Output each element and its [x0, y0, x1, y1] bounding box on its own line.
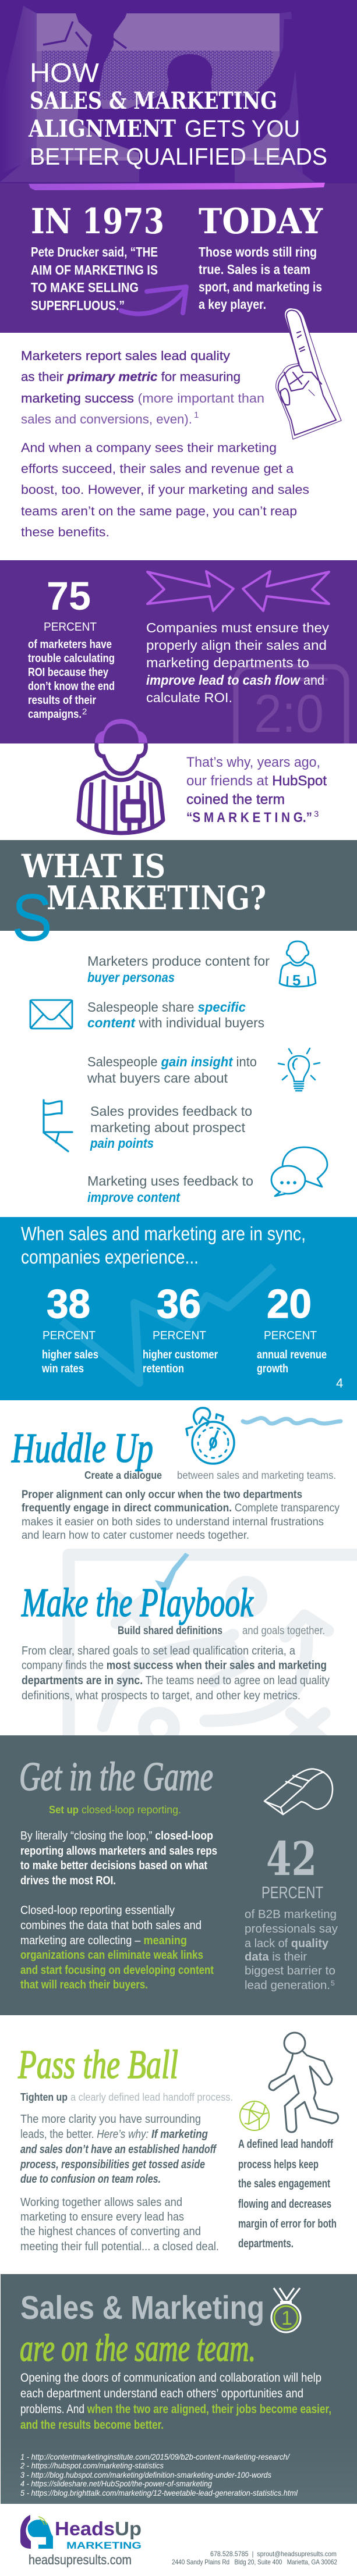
heading: marketing: MARKETING? — [47, 879, 266, 917]
text: handoff explanation: leads, the better. Here’s why: If marketing — [20, 2128, 208, 2141]
stat: 42 percent — [245, 1831, 338, 1992]
text: conclusion: each department understand each others’ opportunities and — [20, 2387, 303, 2400]
item: buyer personas: Marketers produce content for — [87, 953, 270, 969]
text: proper alignment — [22, 1489, 340, 1542]
logo: HeadsUp Marketing: HeadsUp — [55, 2518, 142, 2539]
icon: scoreboard watermark: 2:0 — [254, 684, 324, 743]
panel: 1973 vs today — [0, 183, 357, 333]
subheading: build shared definitions — [118, 1625, 325, 1637]
subheading: set up: Set up — [49, 1803, 79, 1816]
subheading: build shared definitions: Build shared definitions — [118, 1625, 222, 1637]
text: combines the data: marketing are collecting – meaning — [20, 1934, 187, 1947]
stat: 36 percent: higher customer — [143, 1349, 218, 1361]
heading: sales and marketing: Sales & Marketing — [20, 2289, 264, 2326]
text: shared goals — [22, 1645, 330, 1702]
stat: 75 percent: trouble calculating — [28, 652, 115, 665]
text: primary metric — [21, 348, 264, 426]
panel: make the playbook — [0, 1549, 357, 1743]
stat: 36 percent: retention — [143, 1362, 184, 1375]
arrow: brush check — [155, 1553, 189, 1592]
panel: footer — [0, 2504, 357, 2576]
panel: same team conclusion — [1, 2274, 357, 2504]
stat: 42 percent: 5 — [331, 1979, 335, 1987]
stat: 36 percent — [143, 1281, 218, 1375]
item: improve content — [87, 1173, 253, 1205]
arrows: converging brush arrows — [147, 571, 329, 611]
text: conclusion: and the results become better. — [20, 2418, 164, 2432]
list: source references: 4 - https://slideshare.net/HubSpot/the-power-of-smarketing — [20, 2479, 212, 2488]
text: today statement — [199, 244, 322, 312]
stat: 42 percent: professionals say — [245, 1922, 338, 1935]
panel: pass the ball — [0, 2015, 357, 2274]
heading: are on the same team: are on the same team. — [20, 2327, 256, 2369]
text: align departments: properly align their sales and — [146, 638, 327, 653]
panel: in-sync statistics — [0, 1217, 357, 1400]
text: conclusion — [20, 2371, 331, 2432]
crowd in the stands — [42, 51, 273, 100]
icon: light bulb — [278, 1048, 320, 1091]
icon: blue S letter: S — [12, 881, 52, 955]
text: defined lead handoff: departments. — [238, 2237, 294, 2250]
item: specific content: Salespeople share specific — [87, 999, 246, 1015]
text: defined lead handoff — [238, 2138, 337, 2250]
text: conclusion: Opening the doors of communication and collaboration will help — [20, 2371, 321, 2385]
subheading: set up: closed-loop reporting. — [82, 1803, 181, 1816]
stat: 36 percent: PERCENT — [153, 1329, 206, 1342]
text: HubSpot coined smarketing — [186, 755, 327, 826]
stat: 20 percent: annual revenue — [257, 1349, 327, 1361]
text: HubSpot coined smarketing: 3 — [314, 809, 319, 819]
text: combines the data: combines the data that both sales and — [20, 1919, 202, 1932]
stat: 75 percent: 75 — [47, 574, 91, 618]
panel: hero stadium tunnel — [0, 0, 357, 183]
heading: make the playbook: Make the Playbook — [21, 1581, 254, 1625]
stat: 20 percent — [257, 1281, 327, 1375]
item: specific content — [87, 999, 264, 1030]
stat: 75 percent: don’t know the end — [28, 680, 115, 693]
stat: 20 percent: 20 — [267, 1281, 312, 1326]
icon: whistle — [264, 1769, 333, 1814]
heading: when in sync — [21, 1223, 306, 1268]
item: buyer personas: buyer personas — [87, 970, 175, 985]
decorative brush checkmark — [62, 1266, 274, 1383]
website address: headsupresults.com — [29, 2552, 132, 2567]
stat: 42 percent: 42 — [266, 1831, 317, 1886]
text: Drucker quote: SUPERFLUOUS.” — [31, 298, 125, 313]
stat: 75 percent: ROI because they — [28, 666, 109, 679]
title: HOW — [30, 58, 100, 88]
icon: stopwatch — [186, 1408, 234, 1464]
text: combines the data: and start focusing on developing content — [20, 1964, 214, 1977]
text: handoff explanation: due to confusion on team roles. — [20, 2173, 161, 2186]
text: working together: Working together allows sales and — [20, 2196, 182, 2209]
subheading: tighten up: Tighten up — [20, 2091, 68, 2103]
list: source references: 3 - http://blog.hubspot.com/marketing/definition-smarketing-under-100-words — [20, 2470, 271, 2479]
stat: 75 percent: 2 — [82, 707, 87, 717]
icon: chat bubbles — [271, 1147, 327, 1196]
text: handoff explanation — [20, 2113, 217, 2186]
text: shared goals: departments are in sync. The teams need to agree on lead quality — [22, 1674, 330, 1687]
logo: HeadsUp Marketing — [20, 2515, 142, 2551]
stat: 42 percent: of B2B marketing — [245, 1908, 337, 1921]
item: gain insight — [87, 1054, 257, 1086]
subheading: create a dialogue: Create a dialogue — [84, 1469, 162, 1481]
text: HubSpot coined smarketing: That’s why, years ago, — [186, 755, 320, 770]
text: HubSpot coined smarketing: our friends at HubSpot — [186, 773, 327, 789]
text: handoff explanation: process, responsibilities get tossed aside — [20, 2158, 205, 2171]
stat: 75 percent: results of their — [28, 694, 96, 707]
list: source references — [20, 2452, 298, 2497]
referee badge — [123, 802, 143, 820]
stat: 42 percent: PERCENT — [261, 1884, 323, 1902]
text: closing the loop: reporting allows marketers and sales reps — [20, 1845, 217, 1858]
item: specific content: content with individual buyers — [87, 1015, 264, 1030]
stat: 42 percent: data is their — [245, 1950, 307, 1963]
text: primary metric: marketing success (more important than — [21, 391, 264, 405]
text: working together: the highest chances of converting and — [20, 2225, 201, 2238]
text: revenue boost: efforts succeed, their sales and revenue get a — [21, 461, 294, 476]
subheading: create a dialogue — [84, 1469, 336, 1481]
heading: Today: TODAY — [199, 201, 323, 242]
text: closing the loop: drives the most ROI. — [20, 1874, 116, 1887]
arrow: brush arrow to today — [121, 287, 186, 314]
stat: 42 percent: lead generation. — [245, 1979, 330, 1992]
subheading: tighten up: a clearly defined lead handoff process. — [70, 2091, 233, 2103]
icon: gold medal — [271, 2288, 301, 2332]
stat: 20 percent: PERCENT — [264, 1329, 317, 1342]
icon: player with jersey 5: 5 — [292, 972, 301, 989]
stat: 38 percent: win rates — [41, 1362, 84, 1375]
text: handoff explanation: and sales don’t have an established handoff — [20, 2143, 217, 2156]
icon: envelope — [30, 1000, 72, 1029]
title: SALES & MARKETING — [30, 87, 277, 115]
stat: 38 percent: 38 — [47, 1281, 90, 1326]
contact details: 678.528.5785 | sprout@headsupresults.com — [210, 2550, 337, 2558]
panel: smarketing referee — [0, 719, 357, 840]
stat: 75 percent — [28, 574, 115, 721]
icon: gold medal: 1 — [281, 2307, 292, 2329]
stat: 20 percent: growth — [257, 1362, 288, 1375]
item: improve content: improve content — [87, 1190, 181, 1205]
text: today statement: a key player. — [199, 297, 266, 312]
stat: 75 percent: of marketers have — [28, 638, 112, 651]
text: defined lead handoff: process helps keep — [238, 2158, 319, 2171]
list: smarketing items — [30, 941, 327, 1205]
heading: get in the game: Get in the Game — [19, 1755, 213, 1799]
waving scarf — [43, 22, 126, 48]
text: align departments: Companies must ensure they — [146, 620, 330, 635]
title — [28, 58, 327, 170]
silhouette of fan with raised arms — [71, 0, 306, 182]
brush stroke divider — [29, 183, 325, 190]
heading: when in sync: When sales and marketing are in sync, — [21, 1223, 306, 1244]
item: pain points: pain points — [90, 1136, 154, 1151]
icon: player with jersey 5 — [280, 941, 316, 989]
subheading: build shared definitions: and goals together. — [242, 1625, 325, 1637]
panel: what is smarketing heading — [0, 840, 357, 955]
text: align departments — [146, 620, 330, 705]
icon: referee — [79, 719, 163, 833]
text: closing the loop: to make better decisions based on what — [20, 1859, 207, 1872]
text: shared goals: definitions, what prospects to target, and other key metrics. — [22, 1689, 301, 1702]
stat: 75 percent: campaigns. — [28, 708, 82, 721]
text: shared goals: From clear, shared goals to set lead qualification criteria, a — [22, 1645, 296, 1657]
text: proper alignment: and learn how to cater customer needs together. — [22, 1529, 249, 1542]
panel: lead quality text — [0, 308, 357, 560]
stat: 38 percent: higher sales — [42, 1349, 98, 1361]
title: ALIGNMENT — [28, 115, 176, 143]
item: pain points — [90, 1104, 252, 1151]
stat: 42 percent: a lack of quality — [245, 1937, 329, 1950]
text: primary metric: sales and conversions, even). — [21, 412, 192, 426]
text: HubSpot coined smarketing: coined the term — [186, 792, 285, 807]
text: Drucker quote: AIM OF MARKETING IS — [31, 262, 158, 277]
list: source references: 1 - http://contentmarketinginstitute.com/2015/09/b2b-content-marketing-research/ — [20, 2452, 291, 2461]
item: buyer personas — [87, 953, 270, 985]
text: today statement: Those words still ring — [199, 244, 317, 259]
item: gain insight: what buyers care about — [87, 1070, 228, 1086]
panel: ROI statistics — [0, 560, 357, 766]
heading: when in sync: companies experience... — [21, 1246, 199, 1268]
text: align departments: improve lead to cash flow and — [146, 673, 324, 688]
icon: soccer player — [269, 2033, 338, 2132]
text: HubSpot coined smarketing: “S M A R K E T I N G.” — [186, 810, 312, 826]
title: GETS YOU — [185, 115, 300, 142]
stat: 36 percent: 36 — [157, 1281, 201, 1326]
text: revenue boost: these benefits. — [21, 525, 109, 539]
stat: 75 percent: PERCENT — [44, 621, 97, 634]
heading: pass the ball: Pass the Ball — [17, 2043, 178, 2087]
stat: 38 percent — [41, 1281, 98, 1375]
heading: what is: WHAT IS — [21, 847, 165, 885]
item: pain points: marketing about prospect — [90, 1120, 246, 1135]
stat: 38 percent: PERCENT — [43, 1329, 96, 1342]
text: working together: meeting their full potential... a closed deal. — [20, 2240, 219, 2253]
text: Drucker quote: Pete Drucker said, “THE — [31, 244, 158, 259]
icon: playbook diagram watermark — [69, 1554, 357, 1743]
item: gain insight: Salespeople gain insight into — [87, 1054, 257, 1069]
text: working together: marketing to ensure every lead has — [20, 2211, 184, 2223]
heading: huddle up: Huddle Up — [11, 1425, 153, 1471]
stat: 42 percent: biggest barrier to — [245, 1964, 335, 1977]
text: primary metric: Marketers report sales lead quality — [21, 348, 230, 363]
text: primary metric: 1 — [194, 410, 199, 420]
text: combines the data — [20, 1904, 214, 1991]
panel: huddle up — [0, 1400, 357, 1549]
text: handoff explanation: The more clarity you have surrounding — [20, 2113, 201, 2126]
text: combines the data: organizations can eliminate weak links — [20, 1949, 203, 1962]
text: revenue boost: teams aren’t on the same page, you can’t reap — [21, 504, 297, 518]
text: closing the loop: By literally “closing the loop,” closed-loop — [20, 1830, 213, 1842]
text: Drucker quote — [31, 244, 158, 313]
text: combines the data: that will reach their buyers. — [20, 1979, 148, 1991]
subheading: create a dialogue: between sales and marketing teams. — [177, 1469, 336, 1481]
item: improve content: Marketing uses feedback to — [87, 1173, 253, 1189]
text: align departments: calculate ROI. — [146, 690, 232, 705]
text: proper alignment: Proper alignment can only occur when the two departments — [22, 1489, 302, 1501]
subheading: tighten up — [20, 2091, 233, 2103]
text: primary metric: as their primary metric for measuring — [21, 369, 241, 384]
title: BETTER QUALIFIED LEADS — [30, 143, 327, 170]
logo: HeadsUp Marketing: MARKETING — [66, 2541, 142, 2551]
text: revenue boost: And when a company sees their marketing — [21, 440, 277, 455]
text: working together — [20, 2196, 219, 2253]
icon: corner flag — [44, 1100, 72, 1151]
text: today statement: true. Sales is a team — [199, 262, 310, 277]
heading: In 1973: IN 1973 — [31, 201, 164, 242]
icon: foam finger — [276, 308, 341, 439]
text: revenue boost — [21, 440, 309, 539]
text: closing the loop — [20, 1830, 217, 1887]
panel: get in the game — [0, 1735, 357, 2015]
text: defined lead handoff: the sales engagement — [238, 2177, 330, 2190]
list: source references: 2 - https://hubspot.com/marketing-statistics — [20, 2461, 164, 2470]
icon: soccer ball — [240, 2101, 269, 2130]
text: align departments: marketing departments to — [146, 655, 309, 670]
text: shared goals: company finds the most success when their sales and marketing — [22, 1659, 327, 1672]
text: proper alignment: makes it easier on both sides to understand internal frustrations — [22, 1516, 324, 1528]
icon: scoreboard watermark — [236, 667, 347, 766]
text: today statement: sport, and marketing is — [199, 279, 322, 294]
footnote marker 4: 4 — [336, 1376, 343, 1390]
text: combines the data: Closed-loop reporting essentially — [20, 1904, 175, 1917]
text: proper alignment: frequently engage in direct communication. Complete transparency — [22, 1502, 340, 1514]
text: Drucker quote: TO MAKE SELLING — [31, 280, 139, 295]
text: revenue boost: boost, too. However, if your marketing and sales — [21, 482, 309, 497]
contact details — [172, 2550, 337, 2566]
decorative brush squiggle — [243, 1418, 341, 1424]
list: source references: 5 - https://blog.brighttalk.com/marketing/12-tweetable-lead-generation-statistics.html — [20, 2488, 298, 2497]
item: pain points: Sales provides feedback to — [90, 1104, 252, 1119]
